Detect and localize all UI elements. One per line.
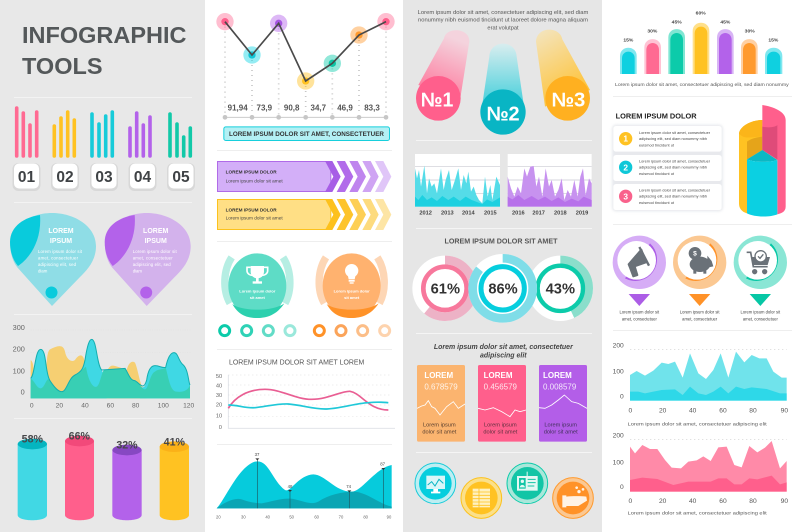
cylinder 66% [65,431,94,520]
bar 45% purple: 45% [720,19,731,25]
area chart: yellow cyan green: 40 [81,403,89,410]
area chart: pink: 0 [620,484,624,491]
label box [224,127,389,140]
label box: LOREM IPSUM DOLOR SIT AMET, CONSECTETUER [229,132,385,138]
card: purple: dolor sit amet [544,429,578,435]
ring indicators [220,326,390,336]
icon: hand [553,478,593,518]
pin: megaphone: Lorem ipsum dolor sit [619,310,660,315]
pin: shopping cart [734,236,787,322]
area chart: peaks: 60 [314,515,320,520]
cylinder 58%: 58% [22,434,44,446]
area chart: pink: 80 [749,498,757,505]
cylinder 58% [18,434,47,520]
card: orange: LOREM [424,371,454,380]
area chart: yellow cyan green: 100 [158,403,169,410]
area chart: peaks: 20 [216,515,221,520]
stat cards [417,365,587,442]
badge: light bulb [319,253,384,318]
bar 30% orange: 30% [745,28,755,34]
text block: italic caption: adipiscing elit [480,352,527,359]
line chart: pink and cyan: 30 [216,393,222,399]
arrow banner: purple: Lorem ipsum dolor sit amet [226,179,284,184]
number badges [12,163,195,191]
list item 1: adipiscing elit, sed diam nonummy nibh [639,137,707,141]
pin badges [613,236,787,322]
rounded bar chart [620,10,782,74]
number badges: 05 [172,169,190,186]
area chart: yellow cyan green: 120 [183,403,195,410]
donut 86%: 86% [488,282,518,298]
teardrop callout: cyan: Lorem ipsum dolor sit [38,249,83,254]
area chart: peaks: 30 [241,515,246,520]
teardrop callout: cyan: diam [38,268,48,274]
number badges: 04 [134,169,151,186]
area chart: peaks: 90 [387,515,392,520]
area chart: cyan: 90 [781,407,788,414]
bars 04 [130,113,150,156]
card: orange: 0.678579 [424,382,458,391]
teardrop callout: purple: LOREM [143,228,169,235]
area chart: peaks: 37 [255,452,260,457]
donut 43%: 43% [546,282,575,298]
pin: piggy bank: Lorem ipsum dolor sit [680,310,720,315]
cylinder 66%: 66% [69,431,91,443]
area chart: pink: 200 [613,433,624,440]
bar 15% [620,37,637,74]
teardrop callout: cyan: amet, consectetuer [38,256,79,260]
card: orange: Lorem ipsum [423,422,456,428]
teardrop callout: purple: Lorem ipsum dolor sit [133,249,177,254]
teardrop callout: cyan: IPSUM [50,238,72,245]
line chart: pink and cyan: 20 [216,402,222,408]
arrow banner: purple [217,161,391,192]
pin: piggy bank: $ [693,251,697,258]
cylinder 41% [160,437,189,520]
area chart: peaks: 40 [265,515,271,520]
badge: trophy: sit amet [250,295,266,300]
bar 60%: 60% [696,10,706,16]
card: pink: dolor sit amet [483,429,518,435]
card: orange [417,365,465,442]
arrow banner: yellow: LOREM IPSUM DOLOR [226,208,277,213]
area chart: yellow cyan green [13,323,195,410]
list item 2: Lorem ipsum dolor sit amet, consectetuer [639,160,711,164]
card: pink: 0.456579 [484,382,518,391]
beam No3: №3 [551,90,585,112]
area chart: peaks: 50 [289,515,295,520]
teardrop callout: cyan: LOREM [48,228,74,235]
line chart: pink and cyan [216,359,395,431]
area chart: cyan: Lorem ipsum dolor sit amet, consectetuer adipiscing elit [628,422,767,428]
area chart: peaks: 87 [380,462,386,467]
area chart: cyan: 20 [659,407,667,414]
area chart: cyan: 60 [719,407,727,414]
card: purple: Lorem ipsum [544,422,577,428]
cylinder chart [18,431,189,520]
title: INFOGRAPHIC [22,22,187,48]
bars 01 [17,108,37,156]
numbered list [612,125,723,211]
badge: trophy: Lorem ipsum dolor [239,289,276,294]
spike chart: 2012-2015: 2015 [484,211,497,217]
teardrop callout: purple: amet, consectetuer [133,256,173,260]
bars 02 [54,112,74,156]
area chart: cyan: 0 [628,407,632,414]
area chart: yellow cyan green: 60 [107,403,114,410]
area chart: cyan: 80 [749,407,757,414]
card: purple [539,365,587,442]
icon: id card [507,463,548,504]
area chart: pink: Lorem ipsum dolor sit amet, consectetuer adipiscing elit [628,510,767,516]
line chart with halos: 83,3 [364,104,380,113]
spike chart: 2012-2015: 2012 [419,211,432,217]
line chart: pink and cyan: LOREM IPSUM DOLOR SIT AMET LOREM [229,359,365,366]
area chart: yellow cyan green: 200 [13,344,25,353]
area chart: peaks [216,452,392,520]
arrow banner: purple: LOREM IPSUM DOLOR [226,170,277,175]
teardrop callout: cyan: adipiscing elit, sed [38,262,77,267]
area chart: cyan [613,342,788,428]
heading: donuts: LOREM IPSUM DOLOR SIT AMET [444,238,558,245]
line chart with halos [216,13,395,120]
badge: light bulb: sit amet [344,295,360,300]
area chart: peaks: 80 [363,515,369,520]
area chart: cyan: 200 [613,342,624,349]
area chart: cyan: 0 [620,393,624,400]
card: pink: LOREM [484,371,513,380]
spike chart: 2016-2019: 2018 [554,211,567,217]
arrow banner: yellow: Lorem ipsum dolor sit amet [226,216,284,221]
pin: shopping cart: Lorem ipsum dolor sit [740,310,781,315]
area chart: peaks: 48 [288,484,293,489]
donut 61% [412,256,478,321]
line chart: pink and cyan: 40 [216,383,222,389]
bar 30% [644,28,661,74]
heading: list: LOREM IPSUM DOLOR [616,111,697,120]
list item 2: 2 [623,162,628,172]
title: TOOLS [22,53,103,79]
number badges: 01 [18,169,35,186]
area chart: yellow cyan green: 80 [132,403,140,410]
card: pink [478,365,526,442]
text block: intro [418,10,589,32]
spike chart: 2016-2019: 2017 [532,211,545,217]
beam No1: №1 [421,90,453,112]
teardrop callout: purple: diam [133,268,142,274]
spike chart: 2012-2015: 2013 [441,211,454,217]
line chart: pink and cyan: 10 [216,413,222,419]
number badges: 03 [95,169,113,186]
icon: monitor [415,463,456,504]
pin: piggy bank: amet, consectetuer [682,317,718,322]
beam No3 [536,30,590,121]
line chart: pink and cyan: 0 [219,425,222,431]
list item 2: adipiscing elit, sed diam nonummy nibh [639,166,707,170]
list item 2 [613,155,722,181]
number badges: 02 [56,169,74,186]
list item 3: 3 [623,191,628,201]
teardrop callout: purple: IPSUM [145,238,167,245]
cylinder 32% [112,439,142,520]
caption: bar chart: Lorem ipsum dolor sit amet, consectetuer adipiscing elit, sed diam nonummy [615,82,789,88]
beam No1 [416,30,469,121]
bar 45%: 45% [672,19,682,25]
donut 86% [468,254,537,323]
line chart with halos: 73,9 [257,104,273,113]
list item 3: euismod tincidunt ut [639,201,675,205]
area chart: yellow cyan green: 0 [21,387,25,396]
bars 05 [170,114,190,156]
badge: trophy [225,253,290,318]
icon: trophy [247,266,268,284]
area chart: pink: 90 [781,498,788,505]
card: orange: dolor sit amet [422,429,457,435]
badge: light bulb: Lorem ipsum dolor [334,289,370,294]
area chart: cyan: 100 [613,369,624,376]
rank beams [416,30,590,135]
bar 15% cyan [765,37,782,74]
area chart: pink: 20 [659,498,667,505]
area chart: peaks: 74 [346,484,352,489]
donut 43% [528,256,593,321]
area chart: pink: 40 [689,498,697,505]
list item 1 [613,126,722,152]
area chart: cyan: 40 [689,407,697,414]
list item 1: 1 [623,134,628,144]
donut charts [412,254,593,323]
card: pink: Lorem ipsum [484,422,517,428]
area chart: peaks: 70 [339,515,344,520]
area chart: yellow cyan green: 0 [30,403,34,410]
area chart: pink: 60 [719,498,727,505]
beam No2 [480,44,526,135]
bar 30% orange [741,28,758,74]
text block: intro: Lorem ipsum dolor sit amet, consectetuer adipiscing elit, sed diam [418,10,589,16]
text block: intro: nonummy nibh euismod tincidunt ut laoreet dolore magna aliquam [418,18,588,24]
pin: piggy bank [673,236,726,322]
icon: bulb [345,264,358,284]
bars 03 [92,112,112,156]
pin: megaphone: amet, consectetuer [622,317,657,322]
list item 1: Lorem ipsum dolor sit amet, consectetuer [639,131,711,135]
beam No2: №2 [486,104,520,126]
spike chart: 2012-2015: 2014 [462,211,475,217]
line chart: pink and cyan: 50 [216,374,222,380]
panel: numbered bar groups [17,108,190,156]
cylinder 32%: 32% [116,439,138,451]
icon: document [461,478,502,518]
bar 60% [693,10,709,74]
list item 1: euismod tincidunt ut [639,143,675,147]
list item 3: adipiscing elit, sed diam nonummy nibh [639,195,707,199]
donut 61%: 61% [431,282,460,298]
bar 30%: 30% [647,28,658,34]
card: purple: LOREM [543,371,572,380]
area chart: yellow cyan green: 100 [13,367,25,376]
bar 45% [668,19,685,74]
arrow banner: yellow [217,199,391,230]
teardrop callout: purple [105,213,191,306]
list item 3: Lorem ipsum dolor sit amet, consectetuer [639,189,711,193]
bar 15% cyan: 15% [768,37,779,43]
3D cylinder [739,105,786,216]
spike chart: 2016-2019: 2016 [512,211,525,217]
line chart with halos: 34,7 [311,104,327,113]
area chart: yellow cyan green: 20 [56,403,63,410]
teardrop callout: cyan [10,213,96,306]
spiky charts [415,154,592,217]
area chart: pink: 0 [628,498,632,505]
spike chart: 2016-2019 [508,154,592,217]
cylinder 41%: 41% [164,437,186,449]
bar 15%: 15% [623,37,634,43]
area chart: pink: 100 [613,459,624,466]
spike chart: 2012-2015 [415,154,500,217]
card: purple: 0.008579 [543,382,577,391]
icon row [415,463,593,518]
pin: shopping cart: amet, consectetuer [743,317,778,322]
line chart with halos: 46,9 [337,104,353,113]
text block: intro: erat volutpat [487,26,519,32]
line chart with halos: 91,94 [228,104,248,113]
text block: italic caption: Lorem ipsum dolor sit amet, consectetuer [434,344,574,351]
line chart with halos: 90,8 [284,104,300,113]
area chart: yellow cyan green: 300 [13,323,25,332]
title [22,22,187,79]
list item 2: euismod tincidunt ut [639,172,675,176]
list item 3 [613,184,722,210]
teardrop callout: purple: adipiscing elit, sed [133,262,171,267]
area chart: pink [613,433,788,516]
bar 45% purple [717,19,734,74]
text block: italic caption [434,344,574,359]
spike chart: 2016-2019: 2019 [576,211,588,217]
pin: megaphone [613,236,666,322]
